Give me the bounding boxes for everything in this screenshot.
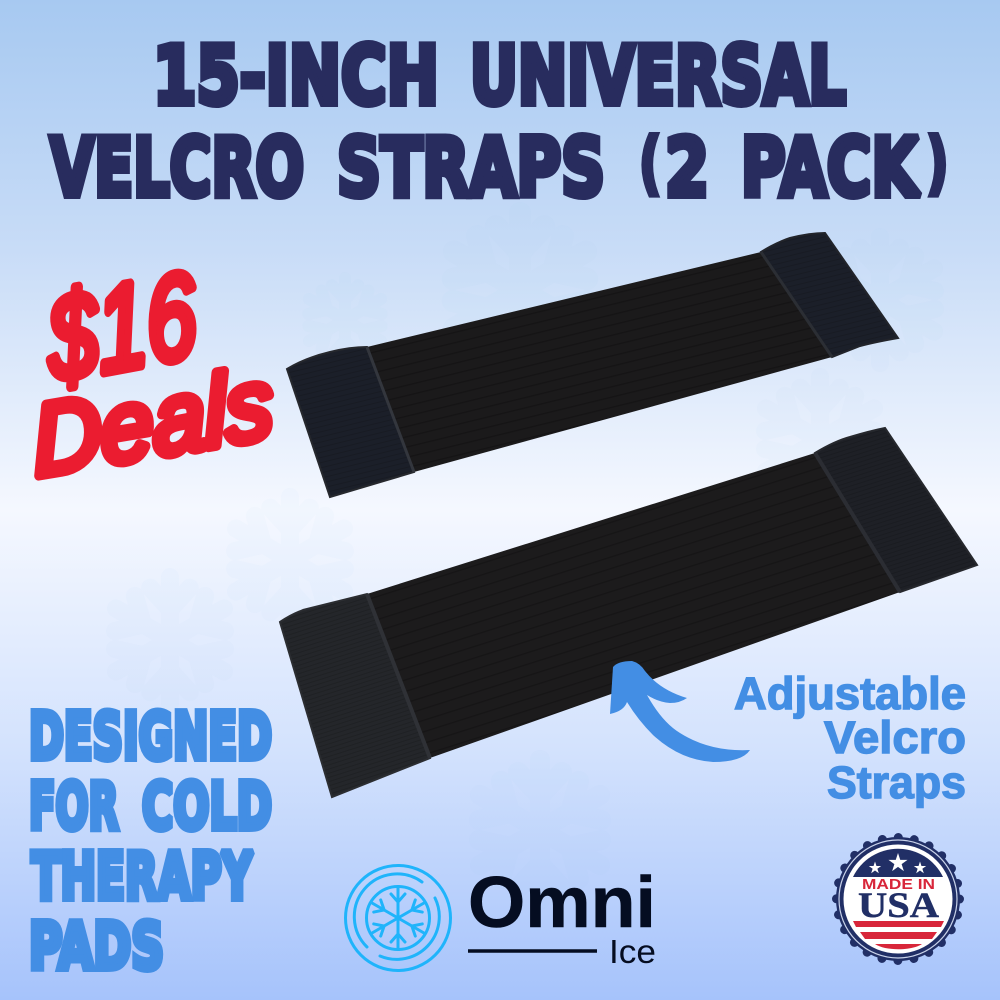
background snowflakes: [115, 213, 935, 900]
stars panel: [853, 849, 943, 877]
product: upper strap: [287, 233, 898, 497]
title: 2: [665, 120, 709, 214]
text: designed for cold therapy pads: COLD: [142, 770, 272, 844]
text: designed for cold therapy pads: [29, 700, 272, 984]
title: VELCRO: [50, 120, 304, 214]
title: STRAPS: [337, 120, 605, 214]
price badge: $16 Deals: $16: [41, 247, 202, 408]
velcro tab: lower right: [815, 428, 977, 592]
arrow: [610, 661, 750, 762]
title: ): [927, 124, 948, 202]
text: designed for cold therapy pads: THERAPY: [32, 840, 253, 914]
badge: made in usa: USA: [858, 885, 939, 925]
stripes: [853, 921, 944, 949]
logo: Omni Ice: [346, 863, 656, 970]
title: 15-INCH: [153, 28, 439, 122]
title: [50, 28, 948, 214]
velcro tab: upper left: [287, 347, 414, 497]
price badge: $16 Deals: Deals: [29, 346, 276, 498]
title: UNIVERSAL: [470, 28, 846, 122]
icon: snowflake rings: [346, 866, 450, 970]
badge: made in usa: [836, 837, 960, 961]
badge: made in usa: MADE IN: [862, 876, 935, 893]
text: designed for cold therapy pads: DESIGNED: [29, 700, 272, 774]
title: PACK: [741, 120, 920, 214]
text: designed for cold therapy pads: FOR: [29, 770, 118, 844]
velcro tab: lower left: [280, 594, 430, 797]
title: (: [640, 124, 660, 202]
product: lower strap: [280, 428, 977, 797]
callout: adjustable velcro straps: Velcro: [824, 712, 966, 763]
logo: Omni Ice: Ice: [609, 933, 656, 970]
wordmark: Omni: [468, 863, 656, 943]
callout: adjustable velcro straps: Adjustable: [734, 668, 966, 719]
callout: adjustable velcro straps: [734, 668, 966, 808]
velcro tab: upper right: [761, 233, 898, 357]
price badge: $16 Deals: [29, 247, 276, 498]
text: designed for cold therapy pads: PADS: [29, 910, 164, 984]
callout: adjustable velcro straps: Straps: [827, 757, 966, 808]
